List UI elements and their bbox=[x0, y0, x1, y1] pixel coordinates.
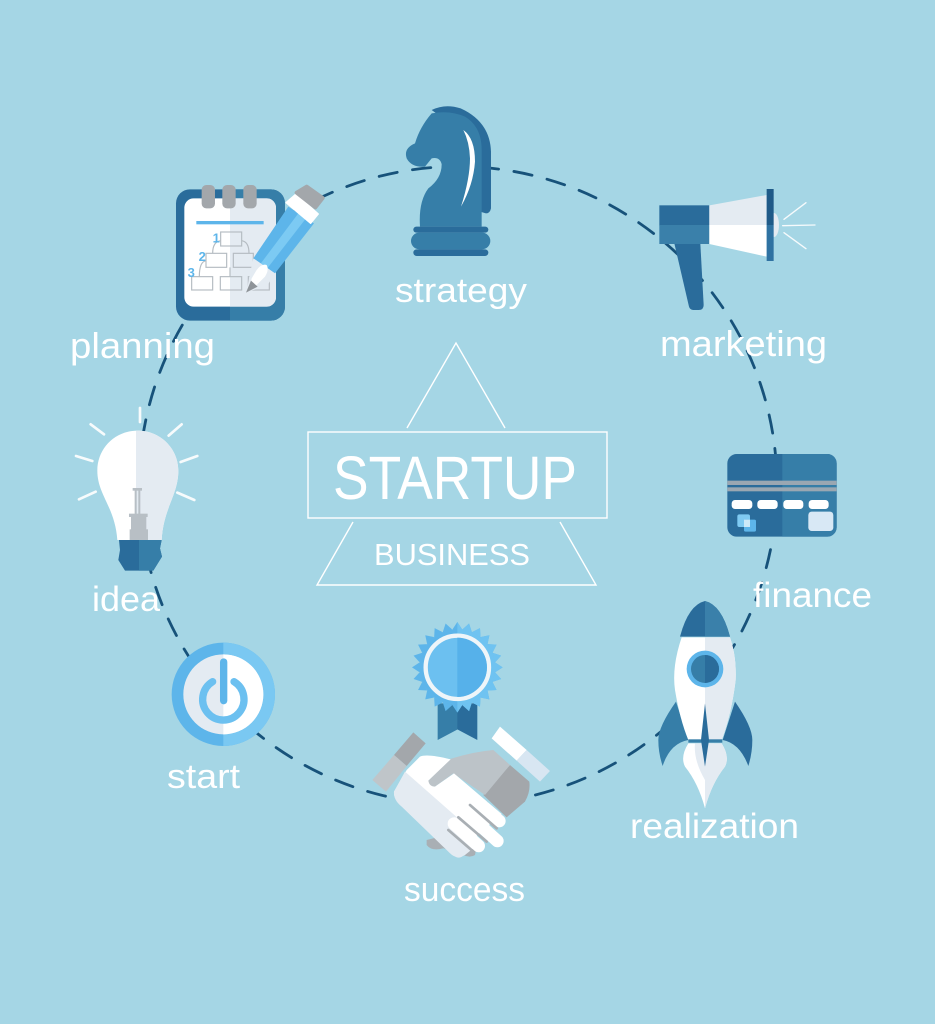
label: strategy: strategy bbox=[395, 272, 527, 310]
icon: chess knight bbox=[406, 106, 491, 256]
icon: rocket bbox=[658, 601, 752, 808]
top triangle bbox=[407, 343, 505, 428]
icon: power button bbox=[172, 643, 275, 746]
bottom triangle bbox=[317, 522, 596, 585]
icon: credit card bbox=[727, 454, 837, 537]
icon: handshake with medal bbox=[372, 622, 550, 857]
handshake hands bbox=[394, 750, 530, 857]
icon: planning notepad with pencil: 3 bbox=[188, 265, 195, 280]
title frame bbox=[308, 432, 607, 518]
right cuff bbox=[492, 727, 550, 782]
medal rosette bbox=[412, 622, 503, 713]
label: start: start bbox=[167, 758, 241, 796]
label: marketing: marketing bbox=[660, 323, 827, 364]
icon: planning notepad with pencil: 1 bbox=[213, 230, 220, 245]
dashed cycle ring bbox=[139, 166, 777, 804]
infographic: startup business cycle bbox=[72, 106, 870, 902]
center badge: startup business bbox=[308, 343, 607, 585]
left cuff bbox=[372, 732, 426, 792]
icon: planning notepad with pencil bbox=[176, 185, 323, 321]
title: startup: STARTUP bbox=[333, 444, 577, 512]
icon: planning notepad with pencil: 2 bbox=[199, 249, 206, 264]
label: finance: finance bbox=[753, 576, 872, 615]
label: success: success bbox=[404, 871, 525, 909]
medal ribbon bbox=[438, 703, 477, 740]
icon: light bulb bbox=[76, 408, 197, 571]
label: planning: planning bbox=[70, 325, 215, 366]
subtitle: business: BUSINESS bbox=[374, 537, 530, 572]
label: realization: realization bbox=[630, 807, 799, 846]
icon: megaphone bbox=[659, 189, 815, 310]
label: idea: idea bbox=[92, 580, 161, 619]
